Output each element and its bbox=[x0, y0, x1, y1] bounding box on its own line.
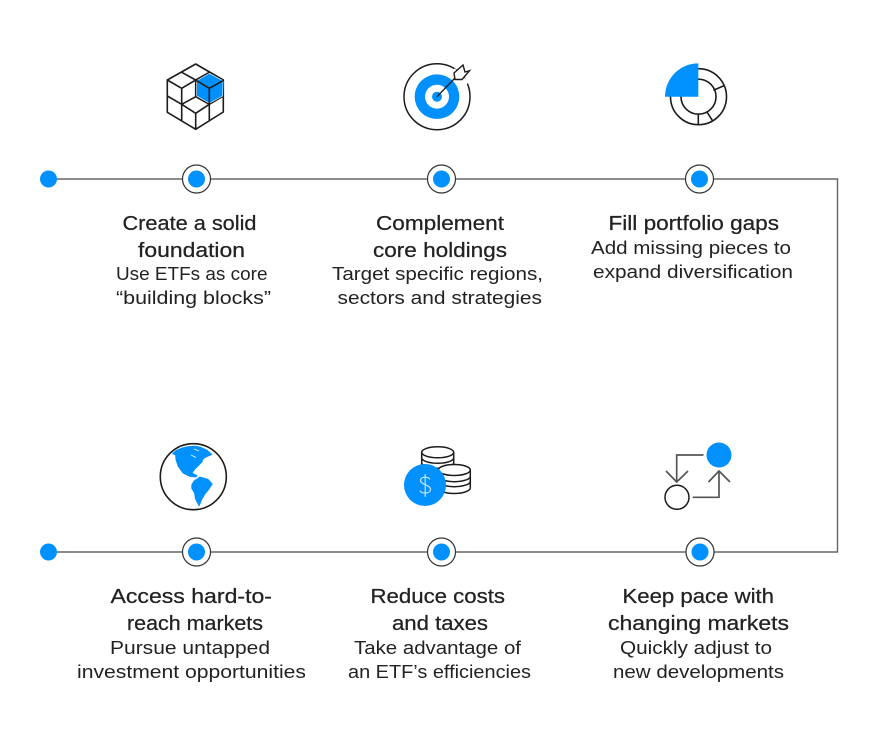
text block: complement core holdings: sectors and strategies bbox=[338, 288, 542, 308]
text block: reduce costs and taxes: an ETF’s efficiencies bbox=[348, 662, 531, 682]
icon: building blocks bbox=[167, 64, 223, 129]
text block: reduce costs and taxes: Take advantage of bbox=[354, 638, 522, 658]
text block: reduce costs and taxes: and taxes bbox=[392, 613, 488, 635]
text block: fill portfolio gaps: Fill portfolio gaps bbox=[608, 213, 779, 235]
text block: create a solid foundation: Use ETFs as core bbox=[116, 264, 268, 284]
text block: keep pace with changing markets: new developments bbox=[613, 662, 784, 682]
text block: fill portfolio gaps: Add missing pieces to bbox=[591, 238, 791, 258]
text block: create a solid foundation: Create a solid bbox=[122, 213, 256, 235]
timeline node 3 bbox=[686, 165, 714, 193]
text block: reduce costs and taxes: Reduce costs bbox=[370, 586, 505, 608]
timeline node 4 bbox=[182, 538, 210, 566]
text block: complement core holdings bbox=[332, 213, 543, 308]
icon: globe bbox=[160, 444, 226, 510]
timeline node 2 bbox=[428, 165, 456, 193]
timeline start dot: top row bbox=[40, 170, 57, 188]
text block: keep pace with changing markets: Quickly adjust to bbox=[620, 638, 772, 658]
icon: adjusting arrows bbox=[665, 442, 732, 509]
text block: fill portfolio gaps: expand diversification bbox=[593, 262, 793, 282]
text block: access hard-to-reach markets bbox=[77, 586, 306, 682]
text block: access hard-to-reach markets: reach markets bbox=[127, 613, 263, 635]
icon: portfolio ring with missing piece bbox=[665, 63, 726, 125]
text block: complement core holdings: Target specific regions, bbox=[332, 264, 543, 284]
text block: fill portfolio gaps bbox=[591, 213, 793, 282]
icon: target with arrow bbox=[404, 64, 470, 130]
text block: keep pace with changing markets: changing markets bbox=[608, 613, 789, 635]
text block: create a solid foundation bbox=[116, 213, 271, 308]
timeline start dot: bottom row bbox=[40, 544, 57, 560]
text block: access hard-to-reach markets: investment opportunities bbox=[77, 662, 306, 682]
timeline node 6 bbox=[686, 538, 714, 566]
text block: reduce costs and taxes bbox=[348, 586, 531, 682]
timeline node 1 bbox=[182, 165, 210, 193]
icon: coins and dollar bbox=[404, 447, 470, 506]
timeline node 5 bbox=[428, 538, 456, 566]
timeline path bbox=[48, 179, 838, 552]
text block: keep pace with changing markets: Keep pace with bbox=[622, 586, 774, 608]
text block: complement core holdings: core holdings bbox=[373, 240, 507, 262]
text block: create a solid foundation: foundation bbox=[138, 240, 245, 262]
text block: access hard-to-reach markets: Pursue untapped bbox=[110, 638, 270, 658]
text block: keep pace with changing markets bbox=[608, 586, 789, 682]
text block: create a solid foundation: “building blocks” bbox=[116, 288, 271, 308]
text block: access hard-to-reach markets: Access hard-to- bbox=[110, 586, 272, 608]
text block: complement core holdings: Complement bbox=[376, 213, 504, 235]
